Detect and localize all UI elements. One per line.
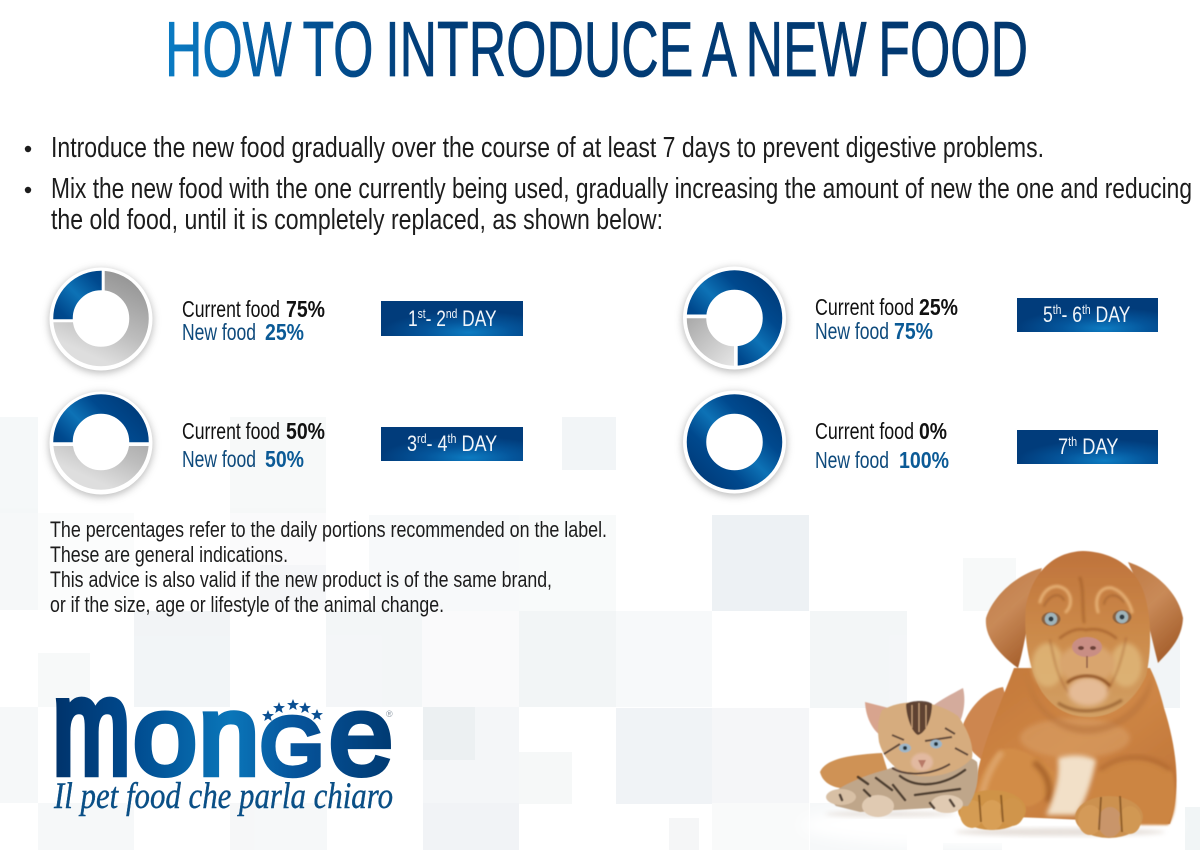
legend: 25/75 [815,294,958,344]
logo stars [262,699,323,721]
legend: 75/25: 25% [265,319,304,345]
day badge: 5th-6th day: th [1053,303,1061,317]
right foreleg [1088,760,1175,825]
explanatory note [50,517,607,617]
logo tagline: Il pet food che parla chiaro [53,776,393,817]
eyes [1042,612,1060,626]
legend: 25/75: 75% [894,318,933,344]
puppy [958,551,1183,838]
day badge: 3rd-4th day: - 4 [427,432,448,456]
day badge: 1st-2nd day: DAY [457,307,497,332]
kitten ears [865,702,904,738]
legend: 50/50: New food [182,446,256,472]
day badge: 1st-2nd day: 1 [408,307,418,332]
kitten body stripes [840,758,968,808]
day badge: 5th-6th day: DAY [1091,303,1130,328]
legend: 25/75: Current food [815,294,914,320]
legend: 0/100: New food [815,447,889,473]
day badge: 5th-6th day: 5 [1043,303,1053,328]
logo wordmark: m [53,653,130,802]
day badge: 3rd-4th day: 3 [407,432,417,456]
forehead stripes [906,701,932,735]
explanatory note: The percentages refer to the daily portions recommended on the label. [50,517,607,542]
logo wordmark: G [260,702,324,792]
donut chart: 75% current, 25% new [49,268,153,373]
kitten [820,688,978,817]
donut chart: 25% current, 75% new [682,266,786,372]
day badge: 7th day: DAY [1077,436,1119,459]
ground glow and shadow [800,803,1180,847]
day badge: 7th day [1017,430,1158,464]
hind quarter [961,687,1012,760]
ears [986,568,1042,668]
cheek mottling [1032,643,1064,687]
photo: puppy and kitten [800,551,1183,847]
legend: 25/75: New food [815,318,889,344]
day badge: 3rd-4th day: th [448,431,456,446]
registered mark: ® [386,709,393,719]
logo wordmark: n [199,673,259,798]
intro bullet list [25,132,1192,236]
legend: 50/50: Current food [182,418,280,444]
explanatory note: These are general indications. [50,542,288,567]
explanatory note: This advice is also valid if the new product is of the same brand, [50,567,552,592]
legend: 75/25: New food [182,319,256,345]
left foreleg [972,749,1054,812]
day badge: 1st-2nd day: - 2 [426,307,446,332]
day badge: 3rd-4th day: rd [417,431,427,446]
day badge: 3rd-4th day [381,427,523,461]
legend: 75/25 [182,296,325,345]
day badge: 7th day: 7 [1058,436,1068,459]
legend: 0/100: 100% [899,447,949,473]
explanatory note: or if the size, age or lifestyle of the animal change. [50,592,444,617]
day badge: 5th-6th day: - 6 [1061,303,1082,328]
legend: 75/25: Current food [182,296,280,322]
head [1025,551,1150,717]
chest sheen [1020,718,1130,758]
day badge: 1st-2nd day: nd [446,307,457,321]
donut chart: 50% current, 50% new [49,392,153,497]
nose [1072,637,1102,657]
background tile pattern [0,417,1200,850]
legend: 25/75: 25% [919,294,958,320]
torso [962,668,1177,824]
legend: 0/100 [815,418,949,473]
white chest patch [1046,756,1096,815]
day badge: 1st-2nd day: st [418,307,426,321]
paws [958,790,1143,838]
legend: 0/100: 0% [919,418,947,444]
legend: 50/50: 50% [265,446,304,472]
day badge: 1st-2nd day [381,301,523,336]
kitten body [828,755,978,812]
logo wordmark: e [329,673,393,798]
day badge: 7th day: th [1068,434,1077,449]
puppy hind paw behind kitten [820,753,892,788]
Monge logo [53,653,393,817]
donut chart: 0% current, 100% new [682,390,786,496]
logo wordmark: o [133,673,197,798]
day badge: 3rd-4th day: DAY [456,432,497,456]
logo wordmark [53,653,393,802]
legend: 0/100: Current food [815,418,914,444]
neck fold [1026,674,1152,734]
day badge: 5th-6th day: th [1082,303,1091,317]
intro bullet list: the old food, until it is completely replaced, as shown below: [51,204,663,236]
legend: 50/50 [182,418,325,472]
kitten head [878,702,972,776]
day badge: 5th-6th day [1017,298,1158,332]
muzzle [1059,644,1115,684]
legend: 75/25: 75% [286,296,325,322]
wrinkles [1040,578,1132,692]
legend: 50/50: 50% [286,418,325,444]
